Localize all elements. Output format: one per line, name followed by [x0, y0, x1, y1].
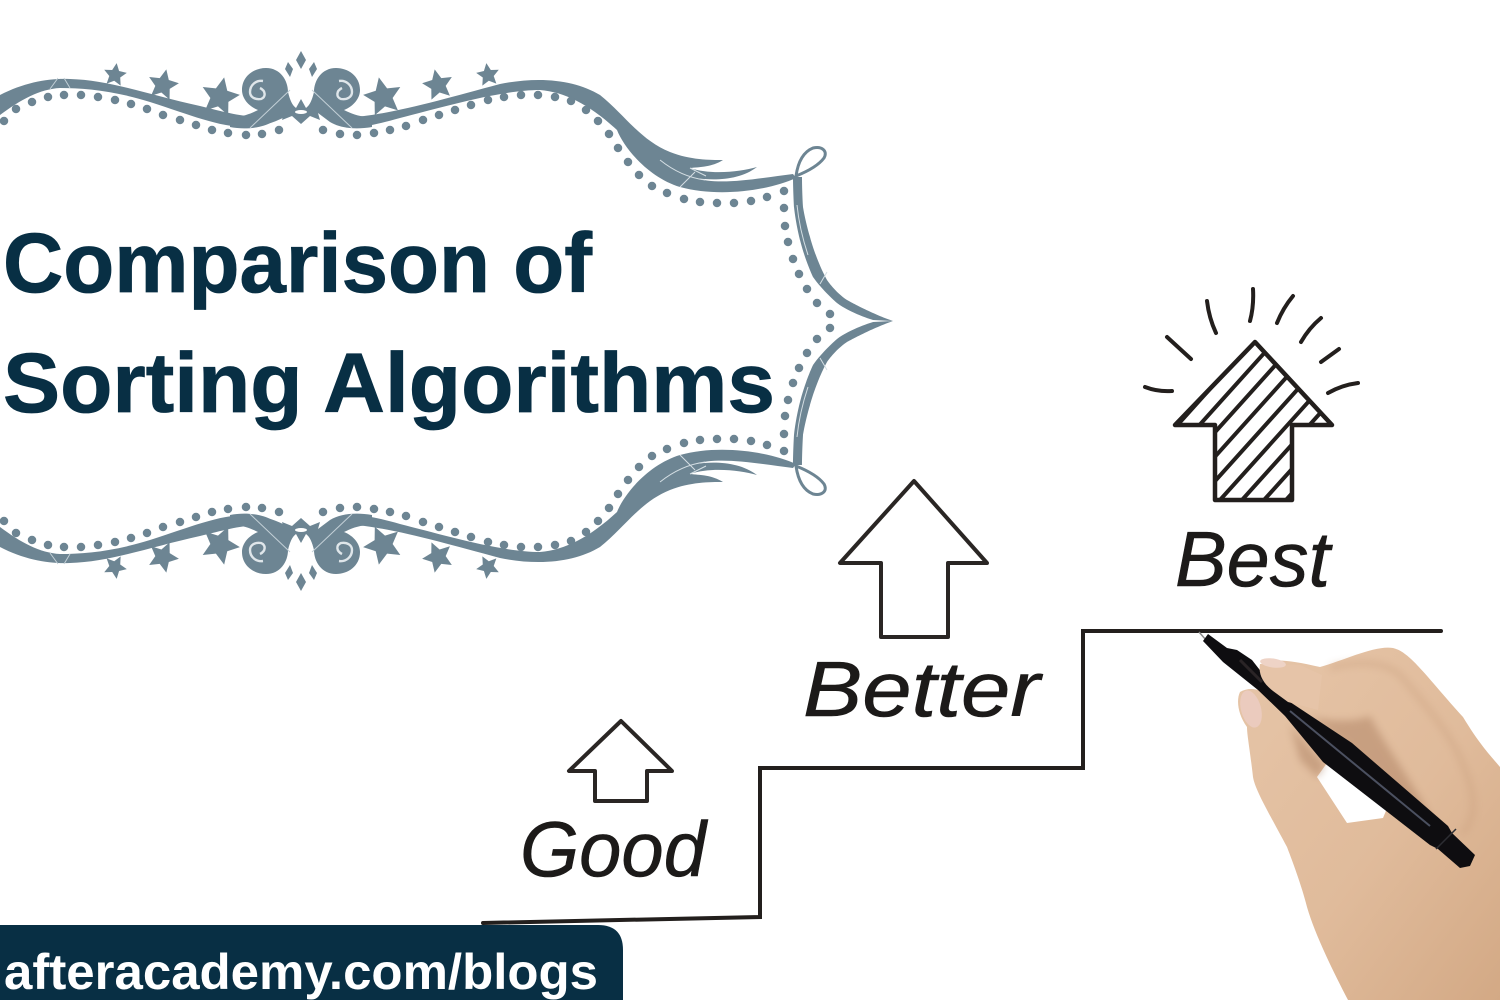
banner: website — [0, 925, 623, 1000]
shadow: index finger contour — [1330, 663, 1473, 835]
hand holding pen — [1199, 632, 1500, 1000]
stair line — [483, 631, 1441, 923]
banner background — [0, 925, 623, 1000]
arrow hatching — [1180, 352, 1320, 498]
banner text: afteracademy.com/blogs — [4, 944, 598, 1000]
icon: best arrow with rays — [1142, 287, 1360, 502]
title line 2: Sorting Algorithms — [3, 336, 775, 430]
hand — [1238, 648, 1500, 1000]
nail: thumb — [1236, 688, 1266, 730]
icon: better arrow — [840, 481, 987, 637]
nail tip on index finger — [1260, 657, 1286, 669]
ornament: bottom half — [0, 321, 893, 591]
label: Best: Best — [1175, 515, 1333, 603]
label: Better: Better — [803, 645, 1043, 733]
title line 1: Comparison of — [3, 216, 593, 310]
arrow outline — [1175, 342, 1332, 500]
decorative frame ornament — [0, 51, 893, 591]
icon: good arrow — [569, 721, 672, 801]
title — [3, 216, 775, 430]
label: Good: Good — [520, 805, 709, 893]
shadow: thumb web — [1290, 725, 1325, 778]
ornament: top half — [0, 51, 893, 321]
rays — [1145, 289, 1358, 393]
index fingertip over pen — [1260, 664, 1322, 710]
shadow: between index finger and pen — [1310, 716, 1435, 825]
pen — [1199, 632, 1475, 868]
